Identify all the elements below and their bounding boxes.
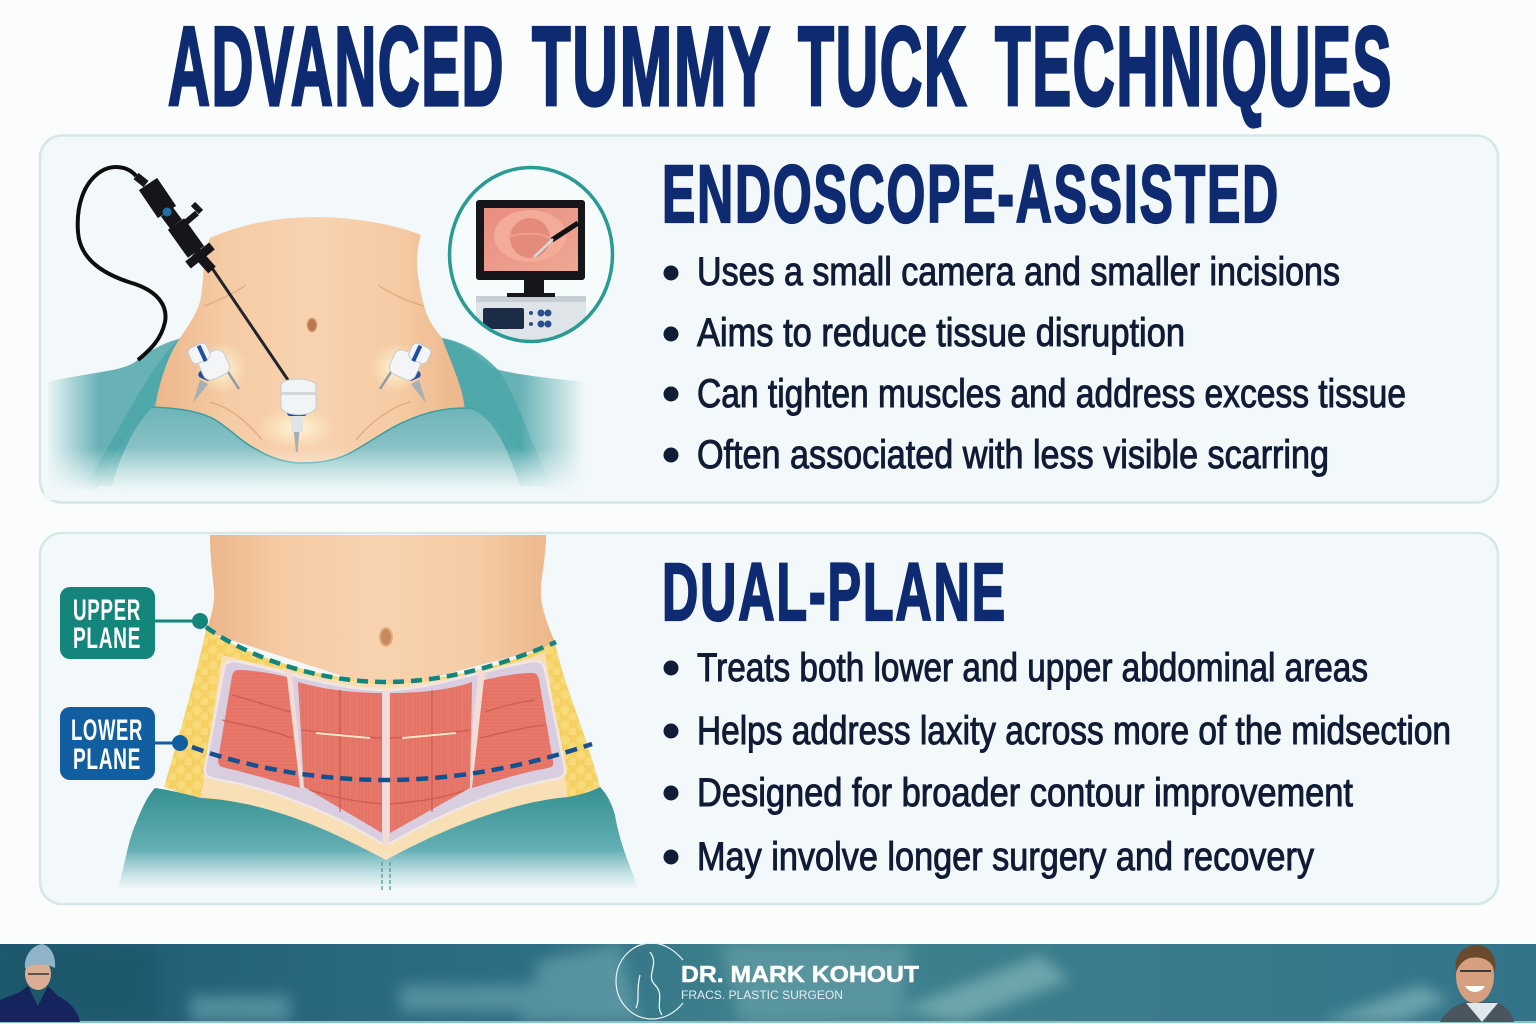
on-screen instrument xyxy=(552,223,578,240)
drape bottom fade xyxy=(118,852,638,888)
bullet 4: Often associated with less visible scarring xyxy=(697,433,1329,477)
endoscope cable xyxy=(78,167,166,360)
callout: upper plane xyxy=(60,587,208,659)
drape edge fades xyxy=(44,360,99,500)
monitor screen xyxy=(484,208,578,271)
fat layer xyxy=(164,630,600,860)
bullet 4: May involve longer surgery and recovery xyxy=(697,835,1314,879)
footer bottom line xyxy=(0,1021,1536,1023)
lower plane dashed line xyxy=(192,744,592,780)
title xyxy=(168,4,1393,129)
footer background xyxy=(0,944,1536,1022)
callout: upper plane: UPPER xyxy=(73,594,141,627)
navel xyxy=(380,628,392,646)
abdominal contour lines xyxy=(204,285,424,440)
endoscope camera body xyxy=(136,176,212,270)
left glow xyxy=(196,342,248,394)
surgeon portrait: left xyxy=(0,944,80,1022)
surgeon portrait: right xyxy=(1440,945,1514,1022)
right oblique muscle xyxy=(472,673,553,788)
heading: dual-plane: DUAL-PLANE xyxy=(662,547,1007,638)
torso xyxy=(206,535,556,690)
bullet 2: Aims to reduce tissue disruption xyxy=(697,311,1185,355)
panel: dual-plane xyxy=(40,533,1498,904)
bullet list: dual-plane xyxy=(664,646,1451,879)
right port xyxy=(380,342,432,403)
panel: endoscope-assisted xyxy=(40,136,1498,502)
callout: lower plane: PLANE xyxy=(73,743,141,776)
icon: monitor inset xyxy=(450,168,612,342)
left rectus muscle xyxy=(298,682,382,833)
logo: body silhouette in ring xyxy=(616,943,683,1019)
right rectus muscle xyxy=(390,682,472,833)
navel xyxy=(308,318,316,332)
footer banner xyxy=(0,943,1536,1023)
bullet 3: Designed for broader contour improvement xyxy=(697,771,1353,815)
back drape xyxy=(48,338,585,492)
camera button xyxy=(162,208,172,216)
bullet 3: Can tighten muscles and address excess tissue xyxy=(697,372,1406,416)
left oblique muscle xyxy=(218,670,300,788)
muscle divisions xyxy=(222,690,545,812)
console buttons xyxy=(529,310,552,328)
drape xyxy=(118,787,638,888)
fascia sheath xyxy=(205,661,565,844)
title: TUMMY xyxy=(532,4,772,129)
panel background xyxy=(40,533,1498,904)
console top xyxy=(476,296,586,302)
tendon highlights xyxy=(316,733,456,738)
incision glow xyxy=(256,408,336,448)
midline and linea xyxy=(288,670,482,844)
console xyxy=(476,302,586,340)
callout: lower plane xyxy=(60,707,188,780)
logo name: DR. MARK KOHOUT xyxy=(681,961,919,987)
panel background xyxy=(40,136,1498,502)
right glow xyxy=(370,342,422,394)
subcutaneous layer xyxy=(201,652,568,860)
upper plane dashed line xyxy=(206,627,556,682)
monitor stand xyxy=(507,280,555,297)
logo subtitle: FRACS. PLASTIC SURGEON xyxy=(681,988,843,1002)
right drape fade xyxy=(520,360,586,500)
illustration: abdominal layers xyxy=(100,535,660,892)
bottom drape fade xyxy=(44,448,589,493)
callout: upper plane: PLANE xyxy=(73,622,141,655)
instrument tip xyxy=(534,239,553,257)
console display xyxy=(483,308,524,329)
centre port xyxy=(281,379,316,452)
title: ADVANCED xyxy=(168,4,505,129)
bullet list: endoscope-assisted xyxy=(664,250,1406,477)
inset ring xyxy=(450,168,612,342)
blurred background shapes xyxy=(0,944,1450,1022)
endoscope shaft xyxy=(212,268,288,380)
left port xyxy=(187,342,239,403)
front drape xyxy=(95,407,545,492)
torso xyxy=(155,217,465,472)
title: TUCK xyxy=(798,4,968,129)
drape seam xyxy=(382,862,390,892)
scope knob xyxy=(184,204,201,224)
illustration: abdomen with endoscope ports xyxy=(44,167,589,500)
drape folds xyxy=(85,338,552,486)
endoscopic view xyxy=(494,210,566,262)
bullet 1: Uses a small camera and smaller incisions xyxy=(697,250,1340,294)
bullet 1: Treats both lower and upper abdominal areas xyxy=(697,646,1368,690)
callout: lower plane: LOWER xyxy=(71,714,143,747)
monitor frame xyxy=(476,200,585,280)
scope collar xyxy=(188,246,212,265)
